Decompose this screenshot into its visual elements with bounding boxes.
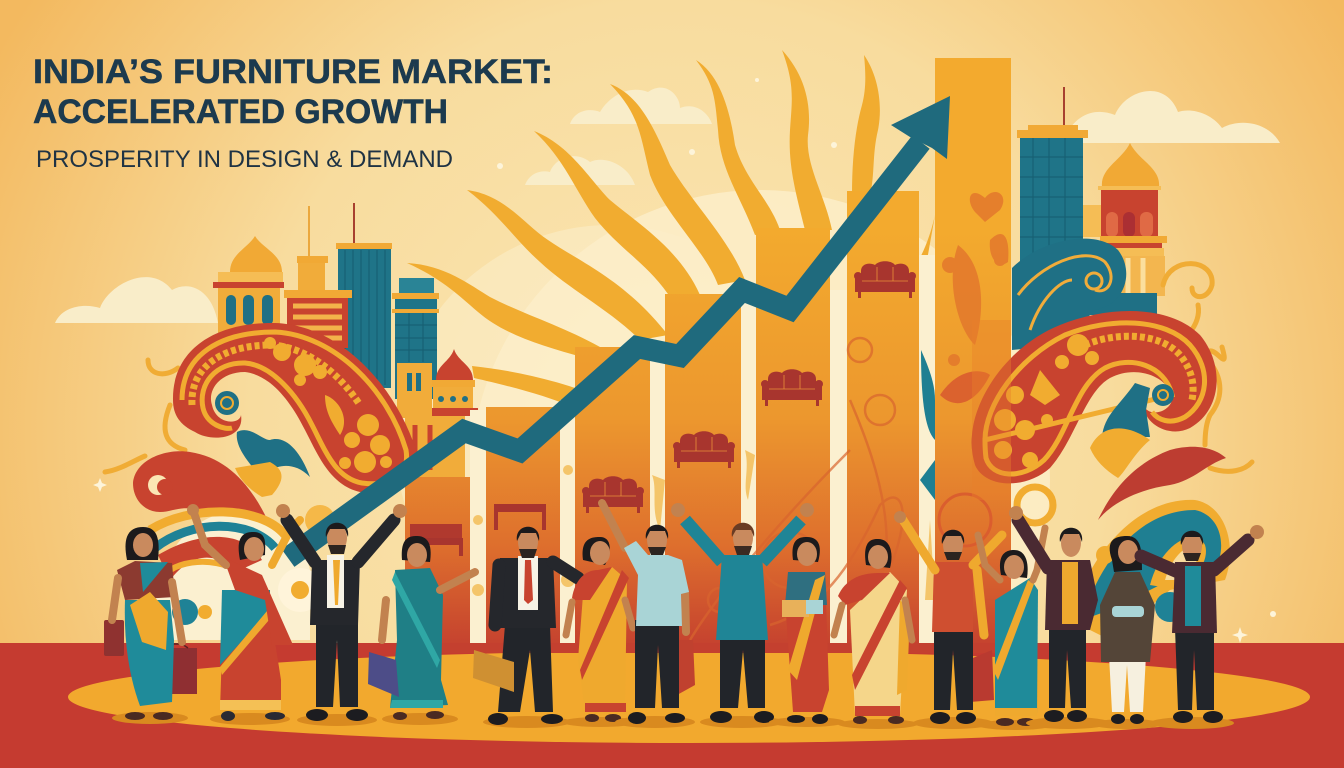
floor	[0, 643, 1344, 768]
person 11: man in orange vest	[894, 511, 1002, 729]
small sky dots	[497, 78, 837, 169]
title: INDIA’S FURNITURE MARKET:	[33, 53, 553, 91]
small swirls, left and right	[105, 264, 1252, 472]
bar chart: rising bars	[405, 58, 1011, 657]
person 5: man in black suit with red tie	[473, 527, 578, 728]
person 13: man in maroon jacket	[1009, 506, 1110, 729]
teal and yellow flower, right	[1090, 383, 1150, 478]
teal and yellow flower, left	[235, 430, 310, 497]
person 3: man in black suit with yellow tie	[276, 504, 407, 726]
person 6: woman in yellow saree	[562, 537, 638, 727]
growth arrow	[288, 96, 950, 558]
person 7: man in light blue shirt	[602, 503, 695, 728]
title: ACCELERATED GROWTH	[33, 93, 448, 131]
bar ornaments	[690, 338, 903, 640]
decorative ornament in columns	[472, 350, 935, 600]
lower right ornament	[1017, 487, 1230, 640]
red leaf, right	[1098, 447, 1226, 520]
person 10: woman in cream saree	[834, 539, 918, 729]
sun glow discs	[395, 190, 1050, 768]
person 14: woman in brown kurta	[1092, 536, 1162, 729]
person 15: man in maroon jacket with raised arms	[1141, 525, 1264, 729]
sparkles	[93, 478, 1276, 643]
person 4: woman in teal saree with purple bag	[368, 536, 475, 725]
person 2: woman in red saree, waving	[187, 504, 300, 725]
right paisley	[972, 311, 1217, 483]
sofa icons on bars	[408, 261, 916, 556]
red leaf, left	[133, 451, 272, 530]
clouds	[55, 88, 1280, 323]
right skyline	[1017, 87, 1167, 315]
title	[33, 53, 553, 131]
subtitle: PROSPERITY IN DESIGN & DEMAND	[36, 146, 453, 173]
left paisley	[173, 323, 416, 493]
person 1: woman in teal saree with bags	[104, 527, 197, 724]
left skyline	[213, 203, 478, 478]
person 12: woman in teal saree with glasses	[977, 528, 1053, 730]
teal swirl, right	[1012, 239, 1126, 350]
cream columns behind bars	[470, 255, 935, 645]
person 8: man in teal kurta with raised arms	[671, 503, 814, 728]
person 9: woman in red saree holding box	[769, 537, 845, 727]
sun rays	[407, 50, 935, 408]
lower left ornament	[150, 505, 335, 640]
bar tint over right paisley	[972, 320, 1011, 500]
bar bases on floor	[405, 643, 1011, 653]
people group	[104, 503, 1264, 730]
